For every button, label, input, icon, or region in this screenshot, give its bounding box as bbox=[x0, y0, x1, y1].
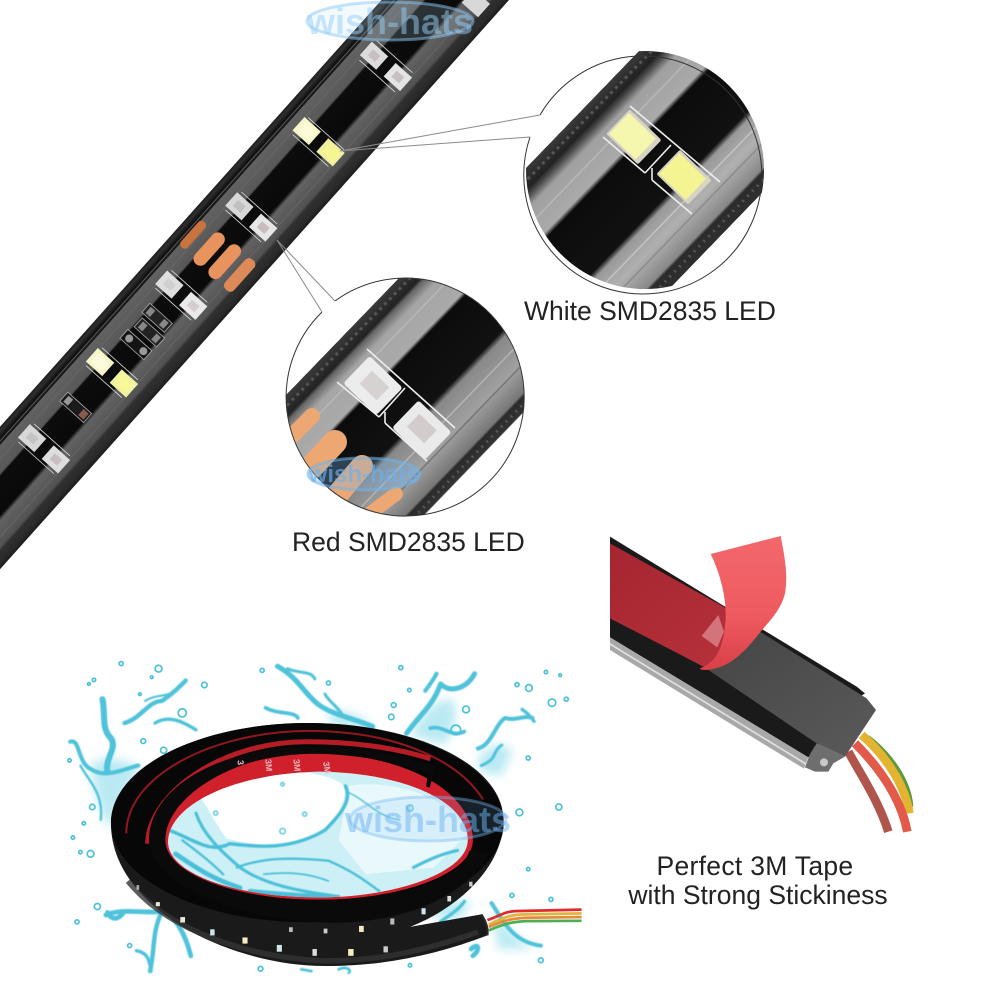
copper pads zoomed bbox=[292, 416, 396, 512]
watermark: top: wish-hats bbox=[306, 1, 473, 42]
inner strip black loop bbox=[149, 747, 489, 923]
black lower band bbox=[610, 617, 820, 757]
coil top surface bbox=[111, 723, 504, 922]
top black rail bbox=[610, 537, 865, 697]
small LEDs bbox=[136, 882, 473, 956]
water splashes bbox=[70, 666, 541, 973]
metal end cap bbox=[805, 743, 845, 772]
centre opening with water bbox=[168, 771, 468, 898]
tape marks: 3M bbox=[291, 759, 302, 772]
resistor small bbox=[60, 392, 92, 423]
LED pair: red top edge bbox=[439, 0, 490, 17]
tape marks: 3M bbox=[263, 759, 274, 772]
pale water masses bbox=[91, 699, 536, 949]
LED strip main diagonal photo bbox=[0, 0, 622, 619]
LED pair: red 4 bbox=[153, 268, 209, 322]
tape marks: 3 bbox=[235, 760, 246, 766]
LED pair: white 1 bbox=[290, 115, 346, 169]
tape marks bbox=[235, 759, 333, 775]
coil outer strip bbox=[111, 723, 503, 966]
metal edge bbox=[610, 637, 808, 769]
watermark: circle: wish-hats bbox=[308, 461, 419, 488]
red adhesive bbox=[610, 543, 760, 670]
label: red LED: Red SMD2835 LED bbox=[292, 527, 525, 557]
LED chip pair bbox=[607, 110, 711, 204]
LED pair: red 2 bbox=[357, 39, 415, 94]
label: white LED: White SMD2835 LED bbox=[524, 296, 776, 326]
3M tape photo bbox=[610, 536, 912, 832]
inner red tape bbox=[165, 754, 473, 900]
glossy lower reflection bbox=[128, 881, 478, 961]
foam pad bbox=[708, 632, 876, 757]
tape marks: 3M bbox=[321, 761, 333, 775]
LED pair: red 5 bbox=[16, 422, 72, 476]
copper pads bbox=[176, 215, 258, 295]
wires bbox=[848, 735, 912, 832]
resistors bbox=[119, 303, 175, 360]
zoom circle: white LED bbox=[526, 51, 764, 289]
water droplets bbox=[68, 662, 568, 971]
label: 3M tape: with Strong Stickiness bbox=[627, 880, 888, 910]
callout outline: red LED bbox=[277, 240, 524, 516]
LED chip pair zoomed bbox=[343, 354, 452, 461]
zoom circle: red LED bbox=[286, 278, 524, 516]
peel flap bbox=[700, 536, 786, 670]
LED pair: white 2 bbox=[84, 346, 140, 400]
coil wires bbox=[487, 910, 582, 930]
red ring 2 bbox=[148, 742, 430, 844]
watermark: coil: wish-hats bbox=[344, 799, 511, 840]
callout outline: white LED bbox=[340, 56, 762, 294]
strip end tip highlight bbox=[481, 914, 488, 935]
coil with water photo bbox=[68, 662, 582, 973]
LED pair: red 3 bbox=[223, 190, 279, 244]
label: 3M tape: Perfect 3M Tape bbox=[657, 851, 853, 881]
red ring 1 bbox=[126, 731, 483, 833]
